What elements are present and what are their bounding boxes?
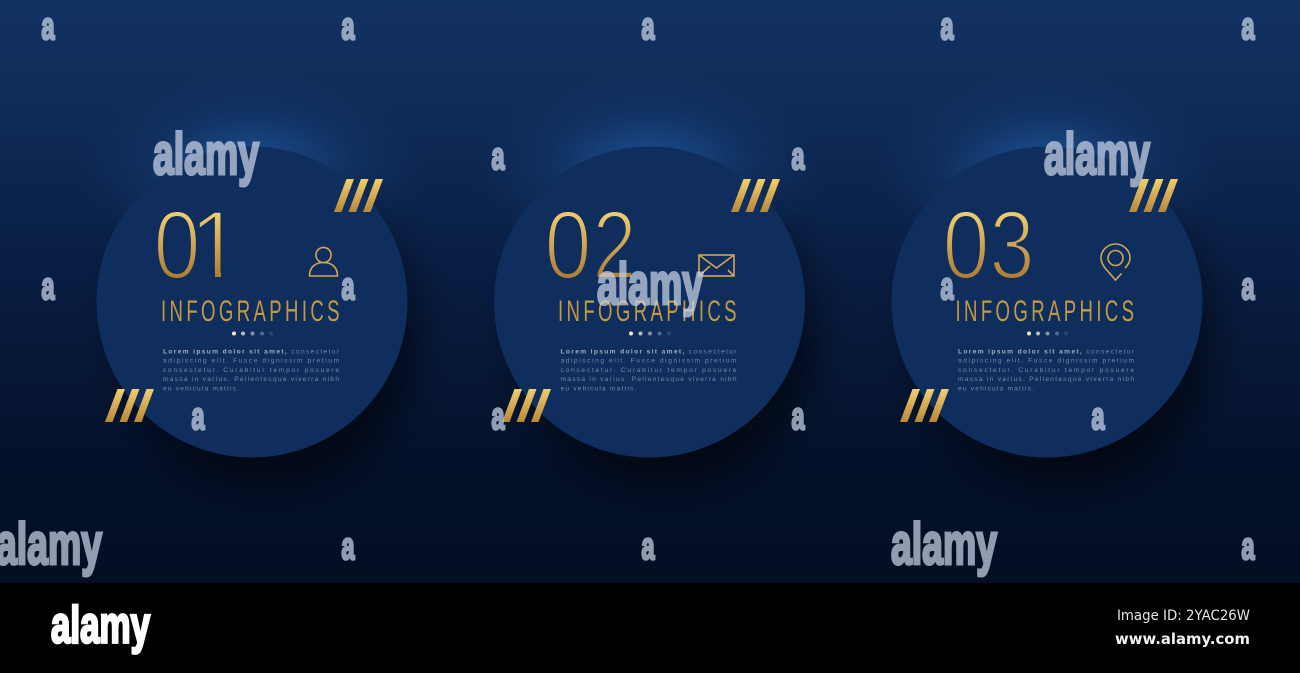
- footer bar: [0, 583, 1300, 673]
- watermarks: a: [642, 6, 655, 48]
- slashes top: [731, 179, 780, 212]
- icon: location pin: [1101, 244, 1130, 280]
- watermarks: a: [1242, 526, 1255, 568]
- slashes bottom: [105, 389, 154, 422]
- text block: massa in varius. Pellentesque viverra nibh: [560, 376, 737, 383]
- watermarks: alamy: [1044, 122, 1150, 187]
- watermarks: a: [342, 266, 355, 308]
- text block: Lorem ipsum dolor sit amet, consectetur: [163, 348, 340, 356]
- watermarks: alamy: [597, 252, 703, 317]
- watermarks: a: [792, 396, 805, 438]
- watermarks: alamy: [0, 512, 102, 577]
- heading: INFOGRAPHICS: [558, 295, 739, 328]
- text block: massa in varius. Pellentesque viverra nibh: [163, 376, 339, 383]
- text block: consectetur. Curabitur tempor posuere: [560, 367, 737, 374]
- number 01: [154, 190, 245, 300]
- number 02: 2: [592, 190, 636, 300]
- number 02: [544, 190, 636, 300]
- number 01: 1: [189, 190, 243, 300]
- text block: Lorem ipsum dolor sit amet, consectetur: [560, 348, 737, 356]
- text block: massa in varius. Pellentesque viverra nibh: [958, 376, 1134, 383]
- text block: eu vehicula mattis.: [560, 385, 637, 392]
- watermarks: a: [940, 6, 954, 48]
- watermarks: a: [42, 6, 55, 48]
- number 02: 0: [544, 190, 592, 300]
- progress dots: [232, 332, 273, 336]
- heading: INFOGRAPHICS: [161, 295, 342, 328]
- slashes bottom: [502, 389, 551, 422]
- text block: [163, 348, 340, 392]
- text block: adipiscing elit. Fusce dignissim pretium: [163, 358, 340, 365]
- watermarks: alamy: [153, 122, 259, 187]
- number 03: [942, 190, 1034, 300]
- text block: [560, 348, 737, 392]
- text block: eu vehicula mattis.: [163, 385, 239, 392]
- number 03: 0: [942, 190, 990, 300]
- slashes top: [1129, 179, 1178, 212]
- text block: [958, 348, 1135, 392]
- watermarks: a: [1242, 266, 1255, 308]
- watermarks: a: [42, 266, 55, 308]
- footer logo: alamy: [51, 596, 150, 654]
- panel: step 03: [872, 70, 1222, 482]
- panel: step 01: [77, 70, 427, 482]
- text block: consectetur. Curabitur tempor posuere: [163, 367, 339, 374]
- watermarks: alamy: [891, 512, 997, 577]
- text block: eu vehicula mattis.: [958, 385, 1034, 392]
- number 03: 3: [990, 190, 1034, 300]
- panel: step 02: [474, 70, 824, 482]
- watermarks: a: [492, 396, 505, 438]
- progress dots: [1027, 332, 1068, 336]
- heading: INFOGRAPHICS: [956, 295, 1137, 328]
- watermarks: a: [342, 6, 355, 48]
- number 01: 0: [154, 190, 200, 300]
- watermarks: a: [642, 526, 655, 568]
- watermarks: a: [342, 526, 355, 568]
- watermarks: a: [940, 266, 954, 308]
- progress dots: [629, 332, 671, 336]
- watermarks: a: [792, 136, 805, 178]
- watermarks: a: [1092, 396, 1105, 438]
- slashes bottom: [900, 389, 949, 422]
- text block: adipiscing elit. Fusce dignissim pretium: [958, 358, 1134, 365]
- text block: consectetur. Curabitur tempor posuere: [958, 367, 1134, 374]
- watermarks: a: [492, 136, 505, 178]
- text block: adipiscing elit. Fusce dignissim pretium: [560, 358, 737, 365]
- footer url: www.alamy.com: [1115, 630, 1250, 648]
- icon: envelope: [699, 255, 734, 276]
- watermarks: a: [192, 396, 205, 438]
- icon: person: [310, 247, 338, 276]
- watermarks: a: [1242, 6, 1255, 48]
- text block: Lorem ipsum dolor sit amet, consectetur: [958, 348, 1135, 356]
- footer image id: Image ID: 2YAC26W: [1117, 608, 1250, 624]
- slashes top: [334, 179, 383, 212]
